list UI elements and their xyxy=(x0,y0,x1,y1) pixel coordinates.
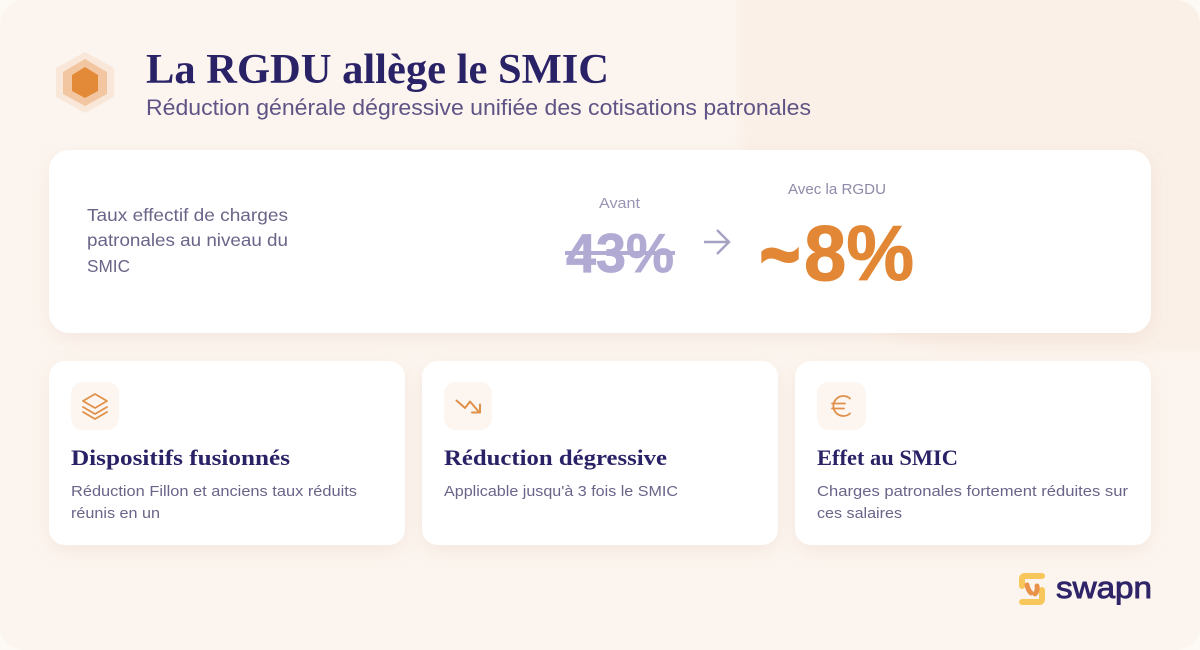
card: dispositifs fusionnés xyxy=(49,361,405,545)
heading: Effet au SMIC xyxy=(817,445,958,470)
subtitle: Réduction générale dégressive unifiée des cotisations patronales xyxy=(146,95,811,120)
text: réunis en un xyxy=(71,505,160,522)
text: ces salaires xyxy=(817,505,902,522)
description text: Taux effectif de charges xyxy=(87,205,288,225)
text: Réduction Fillon et anciens taux réduits xyxy=(71,483,357,500)
logo: swapn xyxy=(1022,570,1152,605)
heading: Dispositifs fusionnés xyxy=(71,445,290,470)
icon: hexagon logo xyxy=(56,52,114,113)
value: ~8% xyxy=(760,209,914,298)
description text: patronales au niveau du xyxy=(87,230,288,250)
icon: trending down xyxy=(444,382,492,430)
heading: Réduction dégressive xyxy=(444,445,667,470)
background xyxy=(735,0,1200,355)
value: ~8%: ~ xyxy=(760,210,800,298)
value: 43% struck through: 43% xyxy=(566,222,674,284)
arrow xyxy=(704,230,729,254)
label: avant: Avant xyxy=(599,196,640,212)
wordmark: swapn xyxy=(1056,570,1152,605)
logo mark xyxy=(1022,576,1042,602)
title: La RGDU allège le SMIC xyxy=(146,47,609,93)
icon: euro xyxy=(817,382,866,430)
text: Charges patronales fortement réduites sur xyxy=(817,483,1128,500)
card: effet au SMIC xyxy=(795,361,1151,545)
panel: taux effectif xyxy=(49,150,1151,333)
icon: layers xyxy=(71,382,119,430)
text: Applicable jusqu'à 3 fois le SMIC xyxy=(444,483,678,500)
value: ~8%: 8% xyxy=(804,209,914,297)
card: réduction dégressive xyxy=(422,361,778,545)
label: avec la RGDU: Avec la RGDU xyxy=(788,182,886,198)
description text: SMIC xyxy=(87,256,130,276)
